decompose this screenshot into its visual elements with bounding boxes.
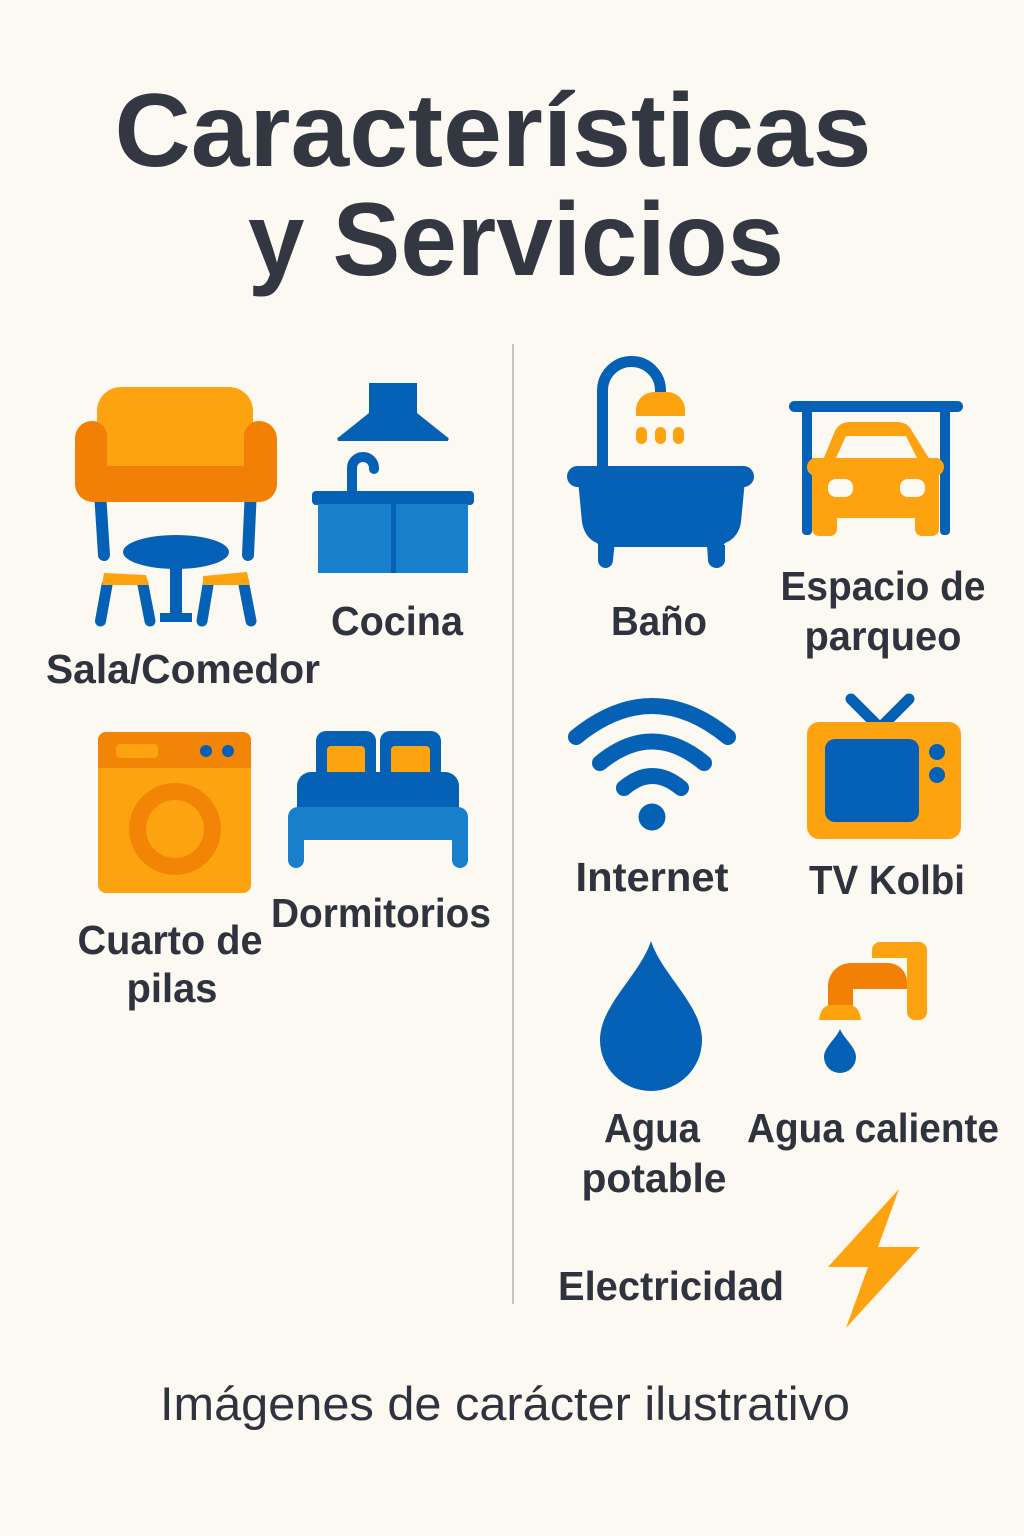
icon: television (807, 699, 961, 839)
label: Agua potable: potable (582, 1155, 726, 1201)
label: Espacio de parqueo: parqueo (804, 613, 962, 659)
icon: washing machine (98, 732, 251, 893)
label: Electricidad: Electricidad (558, 1263, 784, 1309)
label: Cocina: Cocina (331, 598, 464, 644)
icon: lightning bolt (828, 1189, 920, 1328)
icon: water drop (600, 941, 702, 1091)
icon: kitchen (312, 383, 474, 573)
footer note: Imágenes de carácter ilustrativo (160, 1377, 850, 1430)
icon: wifi (576, 706, 728, 830)
label: Sala/Comedor: Sala/Comedor (46, 646, 320, 692)
title: y Servicios (248, 182, 784, 298)
label: Baño: Baño (611, 598, 707, 644)
label: Internet: Internet (576, 854, 729, 900)
label: Cuarto de pilas: Cuarto de (78, 917, 262, 963)
label: Agua potable: Agua (604, 1105, 701, 1151)
icon: bathtub with shower (567, 362, 754, 568)
icon: sofa and dining table (75, 387, 277, 622)
label: Dormitorios: Dormitorios (271, 890, 491, 936)
label: Espacio de parqueo: Espacio de (780, 563, 986, 609)
label: Espacio de parqueo (780, 563, 986, 659)
label: Agua caliente: Agua caliente (747, 1105, 999, 1151)
title: Características (114, 73, 872, 189)
label: TV Kolbi: TV Kolbi (809, 857, 965, 903)
title (114, 73, 872, 298)
label: Cuarto de pilas (78, 917, 262, 1011)
icon: hot water tap (819, 942, 927, 1073)
icon: bed (288, 731, 468, 868)
icon: carport (789, 401, 963, 536)
label: Cuarto de pilas: pilas (126, 965, 218, 1011)
label: Agua potable (582, 1105, 726, 1201)
